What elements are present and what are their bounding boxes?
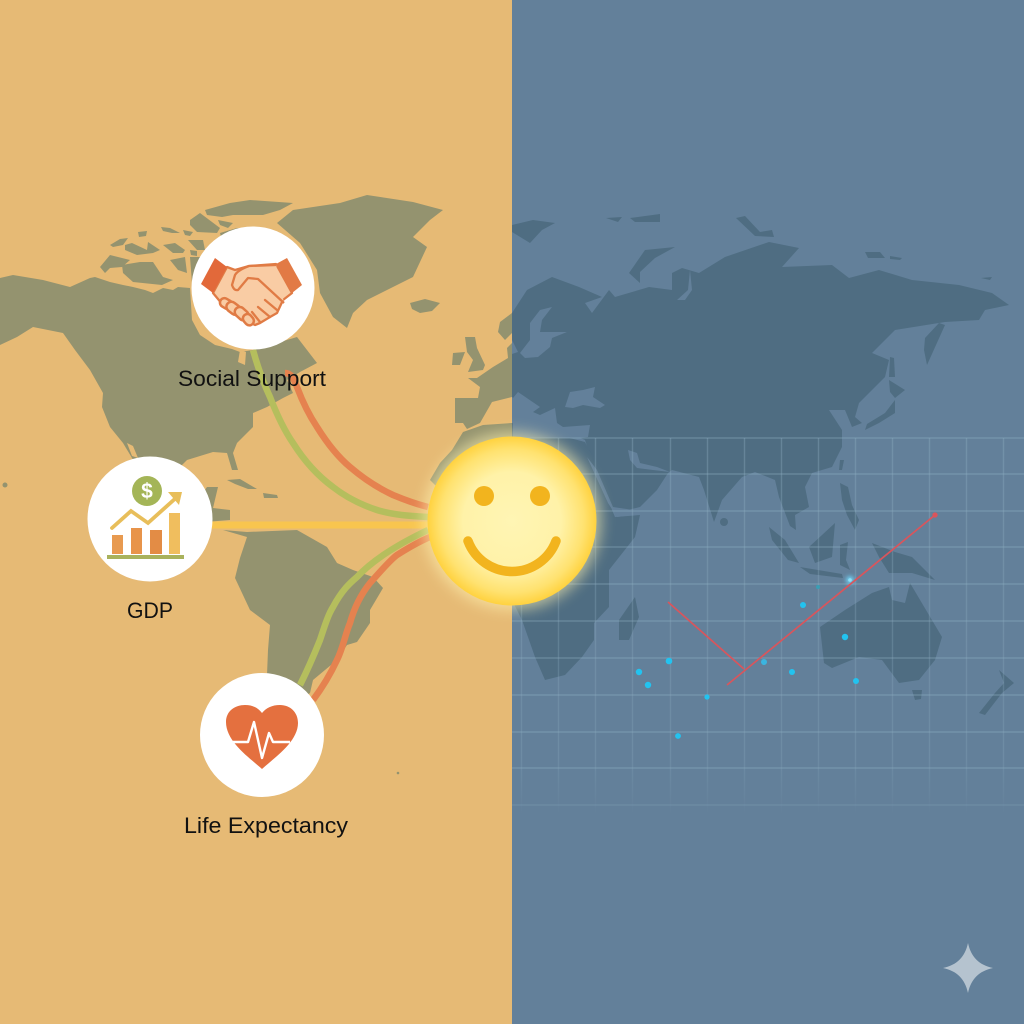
data grid on right panel (512, 438, 1024, 815)
world map: left half (0, 195, 512, 774)
label: Life Expectancy: Life Expectancy (184, 813, 349, 838)
panel: warm left background (0, 0, 512, 1024)
connector: life expectancy orange (313, 537, 430, 700)
world map: right half (512, 214, 1014, 715)
connector: life expectancy green (300, 530, 428, 685)
scatter plot: cyan data points (636, 576, 859, 739)
label: GDP: GDP (127, 598, 173, 623)
smiley face: happiness (423, 432, 601, 610)
label: Social Support: Social Support (178, 366, 327, 391)
connector: social support orange (285, 373, 428, 507)
icon: life expectancy heart (200, 673, 324, 797)
icon: GDP chart (88, 456, 212, 582)
trend lines in red (668, 513, 937, 685)
connector: social support green (253, 350, 428, 517)
panel: cool right background (512, 0, 1024, 1024)
icon: sparkle mark (943, 943, 993, 993)
icon: social support handshake (192, 226, 314, 350)
connector: GDP yellow (210, 522, 428, 528)
icon: GDP chart: $ (141, 480, 153, 503)
